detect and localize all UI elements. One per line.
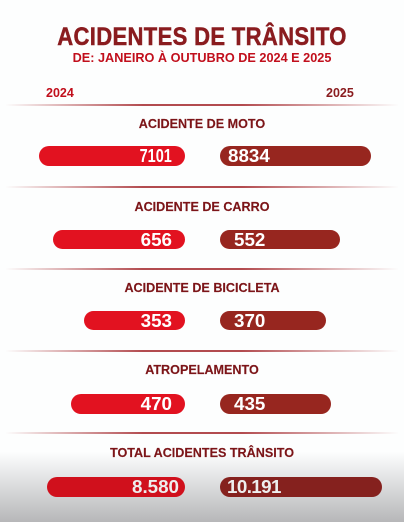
bar 2024: total [46,477,184,496]
heading: total: TOTAL ACIDENTES TRÂNSITO [110,446,294,460]
bar 2024: atropelamento [71,394,184,414]
subtitle: DE: JANEIRO À OUTUBRO DE 2024 E 2025 [73,51,331,65]
bar 2025: atropelamento: 435 [234,393,265,414]
bar 2025: atropelamento [220,394,331,414]
bar 2024: total: 8.580 [132,476,179,497]
bar 2024: atropelamento: 470 [141,393,172,414]
heading: atropelamento: ATROPELAMENTO [145,363,259,377]
heading: acidente de bicicleta: ACIDENTE DE BICICLETA [124,281,280,295]
bar 2025: total: 10.191 [227,476,281,497]
bar 2025: carro: 552 [234,228,265,250]
bar 2025: moto: 8834 [228,145,270,166]
bar 2024: carro: 656 [141,228,172,250]
heading: acidente de moto: ACIDENTE DE MOTO [139,117,265,131]
year label 2025: 2025 [326,86,354,100]
bar 2025: bicicleta [220,310,326,330]
year label 2024: 2024 [46,86,74,100]
bar 2024: moto [39,146,184,166]
heading: acidente de carro: ACIDENTE DE CARRO [134,200,270,214]
bar 2025: moto [220,146,371,166]
bar 2025: carro [220,230,340,249]
bar 2024: bicicleta [84,310,184,330]
bar 2024: moto: 7101 [140,145,172,166]
title: ACIDENTES DE TRÂNSITO [57,23,347,51]
bar 2024: carro [53,230,184,249]
bar 2025: bicicleta: 370 [234,310,265,330]
bar 2025: total [220,477,382,496]
bar 2024: bicicleta: 353 [141,310,172,330]
